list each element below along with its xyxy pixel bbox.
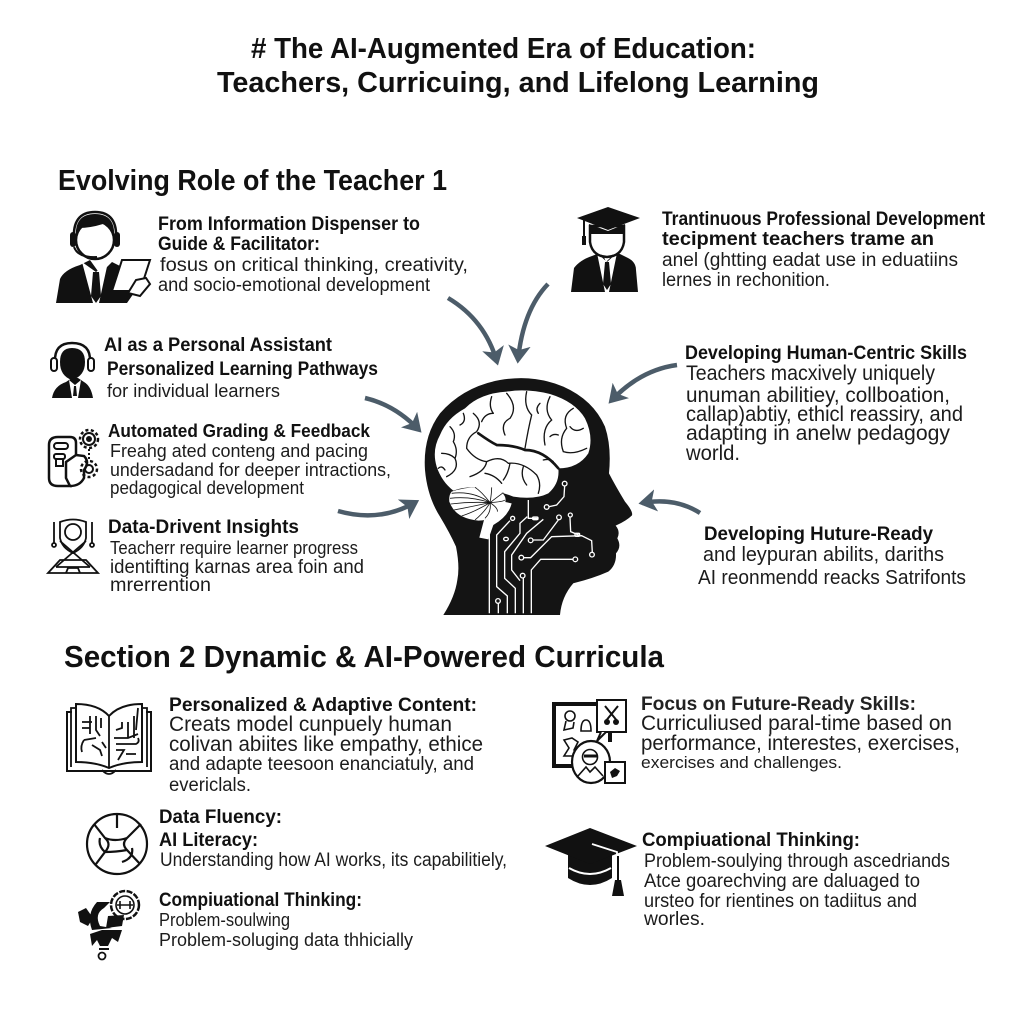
panel: future-ready: Developing Huture-Ready: [704, 524, 933, 545]
text: data-driven insights: mrerrention: [110, 575, 211, 596]
icon: tablet with learners: [554, 700, 626, 783]
text: computational thinking left: Problem-soluging data thhicially: [159, 930, 413, 950]
illustration: head with brain and circuits: [425, 378, 632, 615]
text: computational thinking right: worles.: [643, 909, 705, 930]
arrow: lower left to head: [338, 502, 416, 515]
text: guide and facilitator: [158, 214, 468, 296]
panel: computational thinking right: [545, 828, 950, 930]
text: future-ready skills: [641, 694, 960, 772]
icon: graduation cap: [545, 828, 637, 896]
circuit traces: [489, 481, 594, 613]
panel: human-centric skills: [685, 343, 967, 465]
panel: future-ready: AI reonmendd reacks Satrifonts: [698, 567, 966, 589]
title: [217, 33, 819, 99]
title: Teachers, Curricuing, and Lifelong Learning: [217, 67, 819, 99]
heading: section 1: Evolving Role of the Teacher 1: [58, 165, 447, 197]
text: adaptive content: Personalized & Adaptive Content:: [169, 695, 477, 716]
text: adaptive content: [169, 695, 483, 796]
text: computational thinking right: Problem-soulying through ascedriands: [644, 851, 950, 872]
text: personal assistant: Personalized Learning Pathways: [107, 359, 378, 380]
text: data-driven insights: Teacherr require learner progress: [110, 538, 358, 558]
icon: data insight hourglass: [48, 520, 98, 573]
icon: segmented circle: [87, 814, 147, 874]
icon: teacher with headset and tablet: [56, 212, 150, 303]
panel: professional development: [571, 207, 986, 292]
panel: future-ready: and leypuran abilits, dariths: [703, 544, 944, 566]
panel: data-driven insights: [48, 517, 364, 596]
panel: computational thinking left: [78, 890, 413, 960]
text: computational thinking left: Problem-soulwing: [159, 910, 290, 930]
text: guide and facilitator: Guide & Facilitator:: [158, 234, 320, 255]
text: data fluency: [159, 807, 507, 871]
text: personal assistant: for individual learners: [107, 381, 280, 401]
text: guide and facilitator: and socio-emotional development: [158, 275, 431, 296]
text: future-ready skills: exercises and challenges.: [641, 753, 842, 772]
text: automated grading: Automated Grading & Feedback: [108, 421, 371, 441]
panel: human-centric skills: adapting in anelw pedagogy: [686, 422, 951, 445]
panel: human-centric skills: Developing Human-Centric Skills: [685, 343, 967, 364]
icon: document and gears: [49, 430, 98, 486]
text: professional development: lernes in rechonition.: [662, 270, 830, 291]
panel: human-centric skills: world.: [685, 442, 740, 465]
text: data-driven insights: identifting karnas area foin and: [110, 557, 364, 578]
text: automated grading: undersadand for deeper intractions,: [110, 460, 391, 480]
text: professional development: tecipment teachers trame an: [662, 229, 934, 250]
text: adaptive content: colivan abiites like empathy, ethice: [169, 733, 483, 756]
text: data fluency: Data Fluency:: [159, 807, 282, 828]
text: computational thinking right: Atce goarechving are daluaged to: [644, 871, 920, 892]
text: professional development: [662, 209, 986, 291]
text: future-ready skills: Curriculiused paral-time based on: [641, 712, 952, 735]
text: adaptive content: evericlals.: [169, 775, 251, 796]
head silhouette: [425, 378, 632, 615]
text: future-ready skills: Focus on Future-Ready Skills:: [641, 694, 916, 715]
panel: automated grading: [49, 421, 391, 498]
text: computational thinking right: ursteo for rientines on tadiitus and: [644, 891, 917, 912]
panel: adaptive content: [67, 695, 483, 796]
panel: data fluency: [87, 807, 507, 874]
arrow: right top to head: [611, 365, 677, 401]
arrow: top centre to head: [518, 284, 548, 360]
text: automated grading: pedagogical development: [110, 478, 304, 498]
panel: future-ready skills: [554, 694, 960, 783]
arrow: left to head: [365, 398, 419, 430]
text: professional development: anel (ghtting eadat use in eduatiins: [662, 250, 958, 271]
cerebellum: [449, 487, 512, 539]
panel: guide and facilitator: [56, 212, 468, 303]
icon: graduate in suit: [571, 207, 640, 292]
text: computational thinking left: Compiuational Thinking:: [159, 890, 362, 911]
text: automated grading: [108, 421, 391, 498]
arrows pointing to head: [338, 284, 700, 515]
arrow: lower right to head: [642, 501, 700, 513]
text: adaptive content: Creats model cunpuely human: [169, 713, 452, 736]
panel: human-centric skills: callap)abtiy, ethicl reassiry, and: [686, 403, 963, 426]
text: data fluency: AI Literacy:: [159, 830, 258, 851]
panel: human-centric skills: Teachers macxively uniquely: [686, 362, 935, 385]
icon: person with headphones: [51, 343, 94, 398]
text: guide and facilitator: fosus on critical thinking, creativity,: [160, 255, 468, 276]
text: data fluency: Understanding how AI works, its capabilitiely,: [160, 850, 507, 871]
heading: section 2: Section 2 Dynamic & AI-Powered Curricula: [64, 639, 665, 674]
panel: personal assistant: [51, 335, 378, 401]
text: automated grading: Freahg ated conteng and pacing: [110, 441, 368, 461]
panel: future-ready: [698, 524, 966, 589]
text: adaptive content: and adapte teesoon enanciatuly, and: [169, 754, 474, 775]
text: computational thinking right: Compiuational Thinking:: [642, 830, 860, 851]
text: professional development: Trantinuous Professional Development: [662, 209, 986, 230]
text: data-driven insights: Data-Drivent Insights: [108, 517, 299, 538]
icon: robotic gears: [78, 891, 139, 960]
text: data-driven insights: [108, 517, 364, 596]
arrow: upper left to head: [448, 298, 497, 362]
text: personal assistant: [104, 335, 378, 401]
text: personal assistant: AI as a Personal Assistant: [104, 335, 333, 356]
text: future-ready skills: performance, interestes, exercises,: [641, 732, 960, 755]
panel: human-centric skills: unuman abilitiey, collboation,: [686, 384, 950, 407]
brain: [435, 390, 591, 498]
text: computational thinking left: [159, 890, 413, 950]
title: # The AI-Augmented Era of Education:: [251, 33, 756, 65]
icon: open book with circuits: [67, 704, 151, 774]
text: computational thinking right: [642, 830, 950, 930]
text: guide and facilitator: From Information Dispenser to: [158, 214, 420, 235]
